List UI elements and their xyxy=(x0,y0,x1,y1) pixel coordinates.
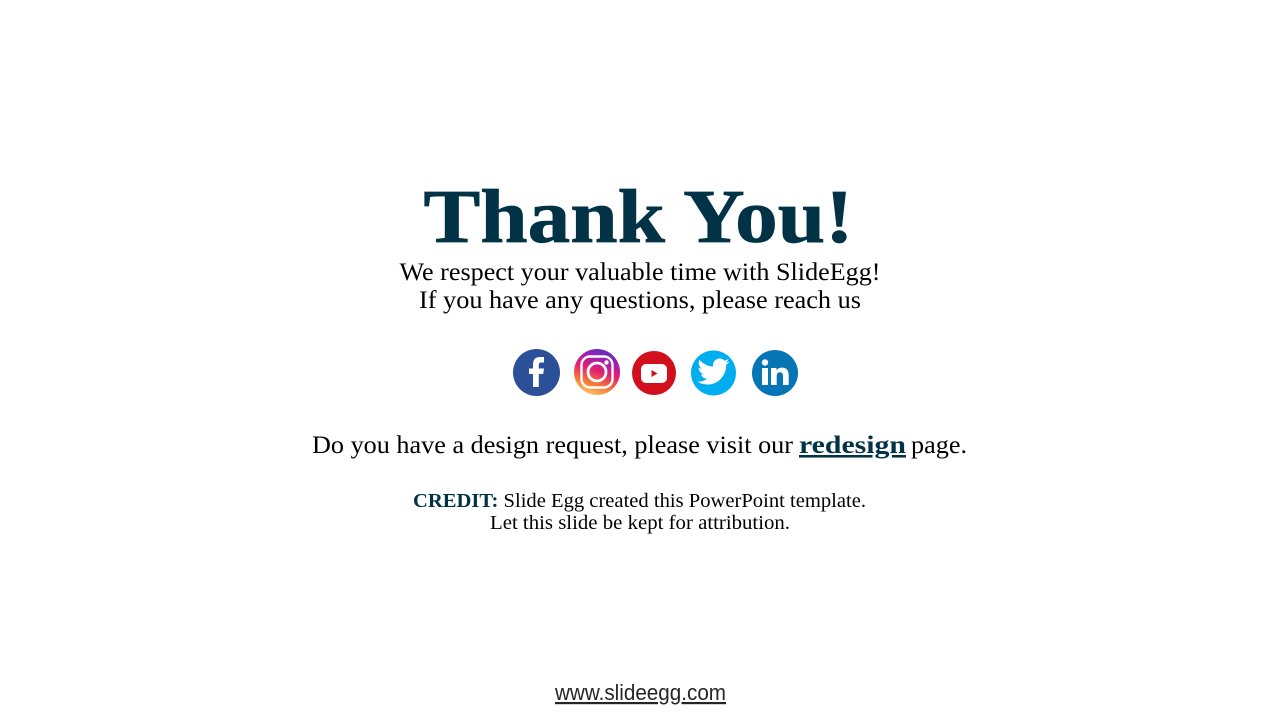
credit text block xyxy=(413,490,866,534)
icon: youtube xyxy=(632,351,676,395)
design request text: page. xyxy=(911,430,967,459)
design request text: redesign xyxy=(799,430,906,459)
icon: instagram xyxy=(574,349,620,395)
icon: linkedin xyxy=(752,350,798,396)
credit text block: Let this slide be kept for attribution. xyxy=(490,512,790,534)
website link: www.slideegg.com xyxy=(554,680,726,705)
design request text: Do you have a design request, please visit our xyxy=(312,430,794,459)
credit text block: CREDIT: Slide Egg created this PowerPoint template. xyxy=(413,490,866,512)
icon: facebook xyxy=(513,349,560,396)
social icons row xyxy=(513,349,798,396)
subtitle text block xyxy=(400,259,880,314)
subtitle text block: We respect your valuable time with SlideEgg! xyxy=(400,259,880,286)
title: Thank You! xyxy=(424,175,854,259)
subtitle text block: If you have any questions, please reach us xyxy=(419,287,861,314)
icon: twitter xyxy=(691,350,736,396)
